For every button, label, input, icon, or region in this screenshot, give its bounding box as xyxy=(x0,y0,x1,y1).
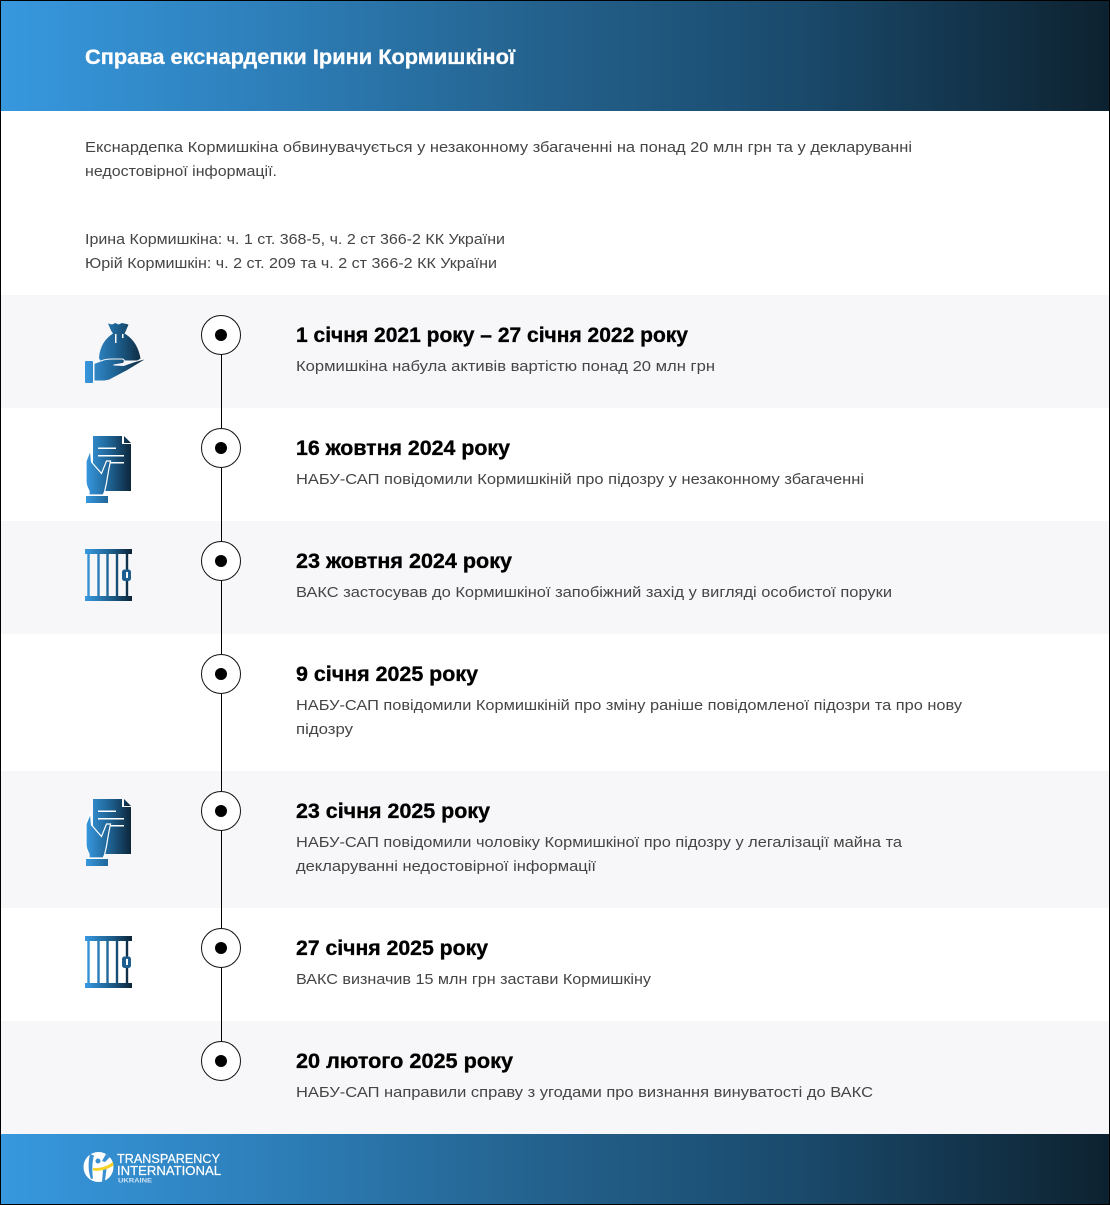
icon: document in hand 2 xyxy=(86,799,131,866)
header band xyxy=(1,1,1109,111)
event 2: НАБУ-САП повідомили Кормишкіній про підозру у незаконному збагаченні xyxy=(296,471,864,488)
event 6: ВАКС визначив 15 млн грн застави Кормишкіну xyxy=(296,971,652,988)
charges text xyxy=(85,231,505,272)
event 5: НАБУ-САП повідомили чоловіку Кормишкіної про підозру у легалізації майна та xyxy=(296,834,903,851)
row backgrounds xyxy=(1,295,1109,1134)
title: Справа екснардепки Ірини Кормишкіної xyxy=(85,46,516,69)
icon: prison bars xyxy=(85,549,132,601)
timeline axis xyxy=(220,335,222,1061)
event 6: 27 січня 2025 року xyxy=(296,937,488,960)
intro text: Екснардепка Кормишкіна обвинувачується у незаконному збагаченні на понад 20 млн грн та у декларуванні xyxy=(85,139,912,156)
icon: document in hand xyxy=(86,436,131,503)
charges text: Ірина Кормишкіна: ч. 1 ст. 368-5, ч. 2 ст 366-2 КК України xyxy=(85,231,505,248)
event 7: 20 лютого 2025 року xyxy=(296,1050,513,1073)
logo: Transparency International Ukraine: INTERNATIONAL xyxy=(117,1164,221,1178)
event 1: Кормишкіна набула активів вартістю понад 20 млн грн xyxy=(296,358,715,375)
icon: prison bars 2 xyxy=(85,936,132,988)
event 5: 23 січня 2025 року xyxy=(296,800,490,823)
event 6 xyxy=(296,937,652,988)
event 3: ВАКС застосував до Кормишкіної запобіжний захід у вигляді особистої поруки xyxy=(296,584,892,601)
event 3 xyxy=(296,550,892,601)
icon: money bag in hand xyxy=(85,323,144,383)
event 4 xyxy=(296,663,963,738)
footer band xyxy=(1,1134,1109,1204)
intro text: недостовірної інформації. xyxy=(85,163,277,180)
event 3: 23 жовтня 2024 року xyxy=(296,550,512,573)
event 5 xyxy=(296,800,903,875)
event 7: НАБУ-САП направили справу з угодами про визнання винуватості до ВАКС xyxy=(296,1084,873,1101)
event 4: 9 січня 2025 року xyxy=(296,663,478,686)
event 5: декларуванні недостовірної інформації xyxy=(296,858,597,875)
logo: Transparency International Ukraine xyxy=(84,1152,221,1184)
timeline markers xyxy=(202,316,240,1080)
event 7 xyxy=(296,1050,873,1101)
logo: Transparency International Ukraine: TRANSPARENCY xyxy=(117,1152,221,1166)
event 1 xyxy=(296,324,715,375)
logo: Transparency International Ukraine: UKRAINE xyxy=(118,1178,153,1184)
event 2: 16 жовтня 2024 року xyxy=(296,437,510,460)
event 1: 1 січня 2021 року – 27 січня 2022 року xyxy=(296,324,688,347)
event 2 xyxy=(296,437,864,488)
charges text: Юрій Кормишкін: ч. 2 ст. 209 та ч. 2 ст 366-2 КК України xyxy=(85,255,497,272)
event 4: НАБУ-САП повідомили Кормишкіній про зміну раніше повідомленої підозри та про нову xyxy=(296,697,963,714)
event 4: підозру xyxy=(296,721,354,738)
timeline dots xyxy=(215,329,227,1067)
intro text xyxy=(85,139,912,180)
